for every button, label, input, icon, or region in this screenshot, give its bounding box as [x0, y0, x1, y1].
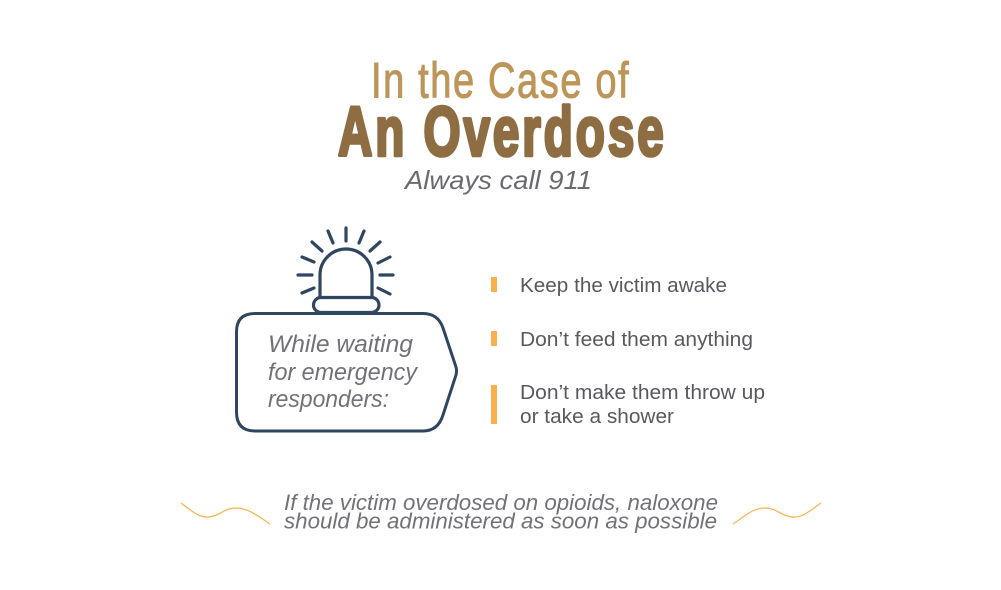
item 1 marker [491, 277, 497, 292]
item 2 marker [491, 331, 497, 346]
title line 2: An Overdose [338, 92, 664, 171]
item 3 marker [491, 385, 497, 424]
title line 1: In the Case of [371, 54, 629, 109]
item 3: or take a shower [520, 406, 674, 428]
subtitle: Always call 911 [403, 165, 592, 195]
checklist [491, 275, 765, 428]
callout box [236, 314, 456, 431]
footer note: If the victim overdosed on opioids, naloxone [284, 490, 718, 515]
item 2: Don’t feed them anything [520, 329, 753, 351]
item 3 [520, 382, 765, 428]
right wave [733, 503, 821, 524]
footer note [284, 490, 718, 534]
callout text: for emergency [268, 359, 419, 386]
callout text: While waiting [268, 331, 414, 358]
item 3: Don’t make them throw up [520, 382, 765, 404]
left wave [181, 503, 270, 524]
callout text: responders: [268, 386, 389, 413]
item 1: Keep the victim awake [520, 275, 727, 297]
callout text [268, 331, 419, 413]
footer note: should be administered as soon as possible [284, 508, 717, 534]
icon: siren [298, 228, 393, 312]
